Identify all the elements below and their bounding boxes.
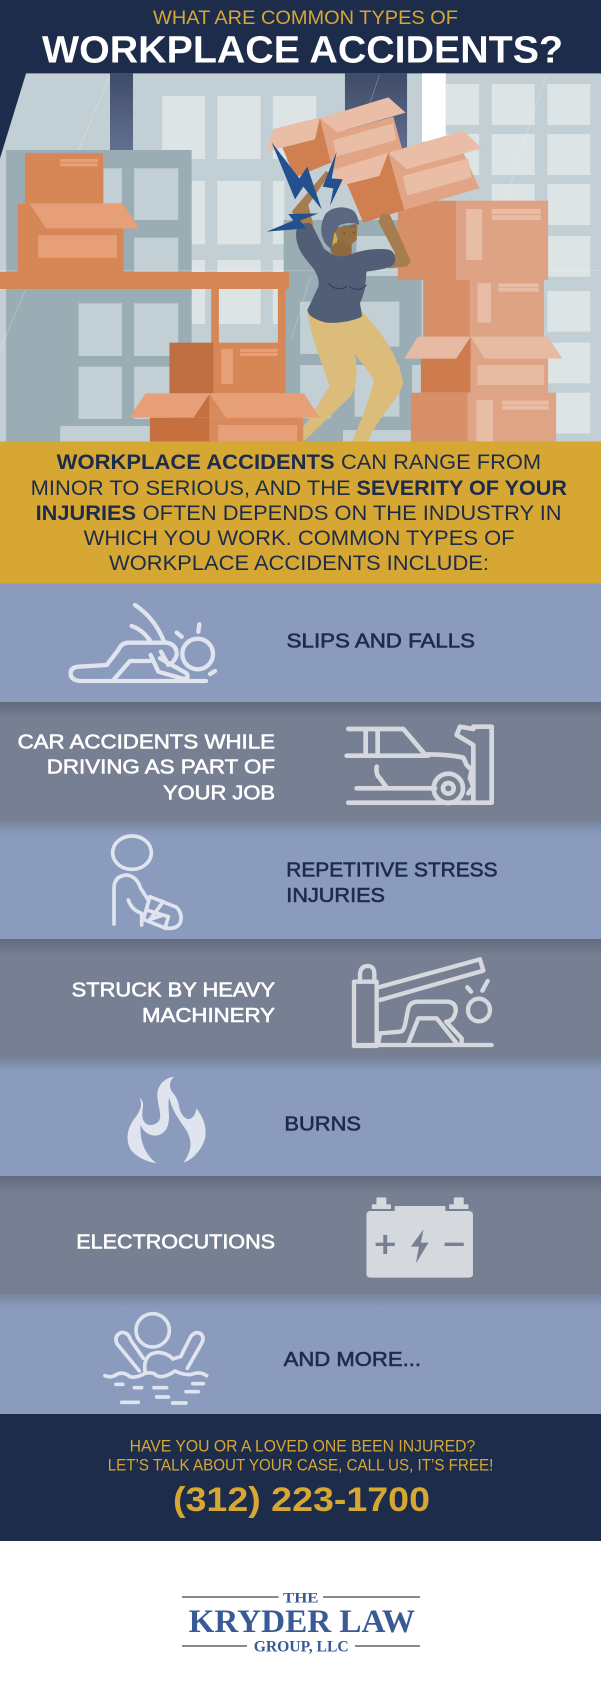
box: falling lower [333,131,482,223]
woman: trousers [303,312,403,442]
panel: call to action [0,1414,601,1541]
label: repetitive line 2: INJURIES [286,885,385,907]
icon: lightning bolts [267,142,343,232]
woman: body [292,171,411,323]
panel: repetitive stress [0,821,601,939]
label: and more: AND MORE... [284,1349,421,1371]
text: intro line 1: WORKPLACE ACCIDENTS [57,451,335,474]
panel: and more [0,1294,601,1414]
icon: machinery press [354,959,492,1046]
box stack: left shelf [0,153,289,344]
label: car accidents line 2: DRIVING AS PART OF [47,757,275,779]
text: intro line 2: SEVERITY OF YOUR [356,477,567,500]
label: struck line 1: STRUCK BY HEAVY [72,980,275,1002]
box: falling upper [267,97,406,177]
label: car accidents line 1: CAR ACCIDENTS WHILE [18,732,275,754]
label: electrocutions: ELECTROCUTIONS [76,1232,275,1254]
panel: slips and falls [0,584,601,702]
icon: arm in cast [113,836,181,928]
left shelving frame [6,150,192,442]
panel: burns [0,1058,601,1176]
text: cta line 2: LET’S TALK ABOUT YOUR CASE, CALL US, IT’S FREE! [108,1457,493,1475]
logo text: the: THE [283,1590,318,1606]
label: slips and falls: SLIPS AND FALLS [287,631,475,653]
icon: car crash [347,727,492,803]
label: struck line 2: MACHINERY [142,1005,275,1027]
logo text: kryder law: KRYDER LAW [189,1604,415,1640]
label: repetitive line 1: REPETITIVE STRESS [286,860,498,882]
logo text: group llc: GROUP, LLC [254,1639,349,1656]
text: intro line 1: CAN RANGE FROM [341,451,541,474]
box: open floor box [129,393,320,442]
text: phone number: (312) 223-1700 [173,1481,430,1519]
heading: workplace accidents: WORKPLACE ACCIDENTS? [42,30,563,72]
text: intro line 4: WHICH YOU WORK. COMMON TYPES OF [84,527,515,550]
panel: intro text [0,442,601,584]
text: intro line 2: MINOR TO SERIOUS, AND THE [31,477,351,500]
label: burns: BURNS [284,1114,361,1136]
text: intro line 2 [31,477,567,500]
rear shelving frame [284,220,422,442]
icon: battery [366,1197,473,1278]
panel: struck by machinery [0,939,601,1058]
text: intro line 1 [57,451,541,474]
icon: flame [128,1077,206,1163]
illustration: warehouse accident scene [0,73,601,442]
label: car accidents line 3: YOUR JOB [163,783,275,805]
panel: car accidents [0,702,601,821]
logo: the kryder law group [182,1590,420,1656]
text: intro line 3: INJURIES [36,502,136,525]
icon: person fallen [71,605,215,681]
text: intro line 5: WORKPLACE ACCIDENTS INCLUDE: [109,552,489,575]
box stack: right [398,201,562,442]
panel: electrocutions [0,1176,601,1294]
panel: header [0,0,601,170]
icon: person drowning [105,1314,207,1403]
heading: what are common types of: WHAT ARE COMMON TYPES OF [153,7,458,29]
text: intro line 3: OFTEN DEPENDS ON THE INDUSTRY IN [143,502,562,525]
text: cta line 1: HAVE YOU OR A LOVED ONE BEEN INJURED? [130,1438,475,1456]
box stack: floor centre upper [169,343,286,393]
